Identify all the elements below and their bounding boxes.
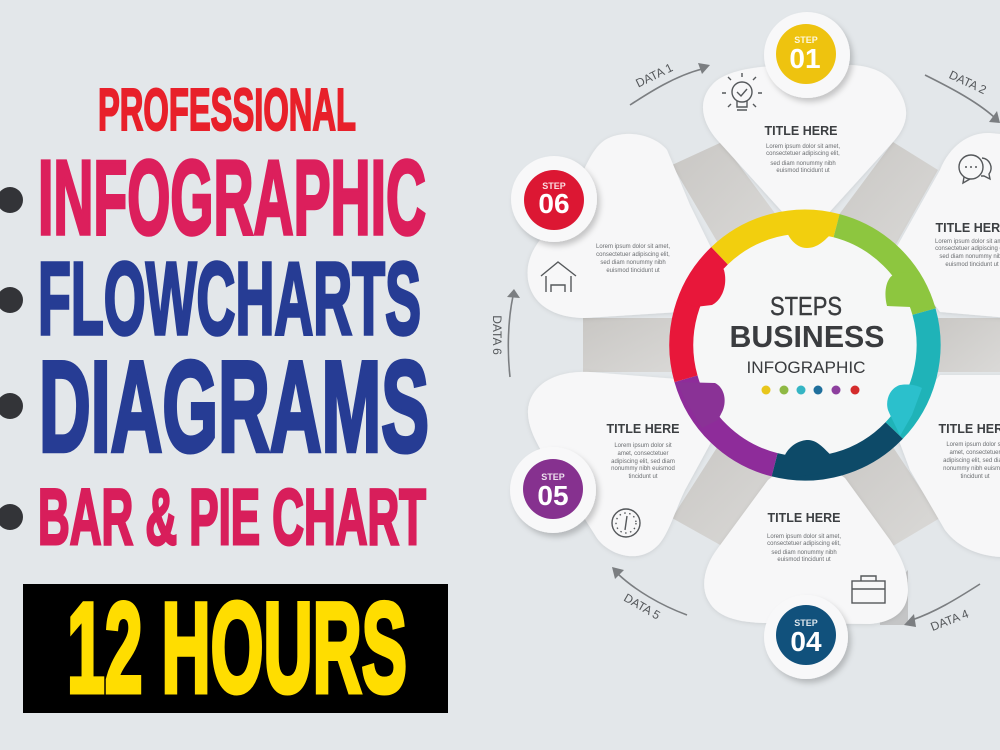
data 2 arrow: DATA 2 bbox=[947, 68, 989, 97]
data 5 arrow: DATA 5 bbox=[621, 591, 663, 623]
step 6 badge: 06 bbox=[538, 188, 570, 219]
title: step 1: TITLE HERE bbox=[765, 124, 837, 138]
body text: step 6: Lorem ipsum dolor sit amet, bbox=[596, 244, 670, 250]
data 2 arrow bbox=[925, 68, 1000, 123]
step 4 badge: 04 bbox=[790, 626, 822, 657]
body text: step 4: sed diam nonummy nibh bbox=[771, 550, 837, 556]
data 6 arrow bbox=[490, 289, 520, 377]
step 4 badge: STEP bbox=[794, 618, 818, 628]
body text: step 5: nonummy nibh euismod bbox=[611, 466, 675, 472]
ring segment: navy bbox=[772, 430, 894, 478]
heading: infographic: INFOGRAPHIC bbox=[38, 139, 426, 257]
data 4 arrow bbox=[904, 584, 980, 634]
body text: step 5: tincidunt ut bbox=[628, 474, 658, 480]
icon: chat bubbles bbox=[959, 155, 991, 183]
body text: step 4 bbox=[767, 534, 841, 563]
centre title: INFOGRAPHIC bbox=[746, 358, 866, 377]
body text: step 3 bbox=[943, 442, 1000, 480]
heading: flowcharts: FLOWCHARTS bbox=[38, 241, 421, 356]
body text: step 6: euismod tincidunt ut bbox=[606, 268, 660, 274]
data 1 arrow bbox=[630, 60, 710, 105]
banner: 12 hours bbox=[23, 577, 448, 720]
heading: professional: PROFESSIONAL bbox=[98, 77, 356, 143]
centre disk bbox=[691, 231, 919, 459]
title: step 5: TITLE HERE bbox=[607, 422, 679, 436]
step 6 badge bbox=[511, 156, 597, 242]
step 5 badge: STEP bbox=[541, 472, 565, 482]
icon: briefcase bbox=[852, 576, 885, 603]
panel: step 2 petal bbox=[895, 133, 1000, 318]
centre title: STEPS bbox=[770, 291, 842, 321]
body text: step 3: amet, consectetuer bbox=[949, 450, 1000, 456]
banner: 12 hours: 12 HOURS bbox=[67, 577, 407, 720]
body text: step 1: consectetuer adipiscing elit, bbox=[766, 151, 840, 157]
step 6 badge: STEP bbox=[542, 181, 566, 191]
body text: step 2: euismod tincidunt ut bbox=[945, 262, 999, 268]
body text: step 5: adipiscing elit, sed diam bbox=[611, 459, 675, 465]
ring segment: green bbox=[837, 226, 936, 312]
body text: step 6: consectetuer adipiscing elit, bbox=[596, 252, 670, 258]
body text: step 2 bbox=[935, 239, 1000, 268]
body text: step 1: Lorem ipsum dolor sit amet, bbox=[766, 144, 840, 150]
body text: step 4: euismod tincidunt ut bbox=[777, 557, 831, 563]
body text: step 6 bbox=[596, 244, 670, 274]
step 1 badge bbox=[764, 12, 850, 98]
data 4 arrow: DATA 4 bbox=[929, 607, 971, 634]
body text: step 1: euismod tincidunt ut bbox=[776, 168, 830, 174]
body text: step 3: tincidunt ut bbox=[960, 474, 990, 480]
data 6 arrow: DATA 6 bbox=[490, 315, 504, 355]
segmented colour ring bbox=[677, 213, 936, 478]
body text: step 6: sed diam nonummy nibh bbox=[600, 260, 666, 266]
body text: step 1 bbox=[766, 144, 840, 174]
panel: step 3 petal bbox=[895, 375, 1000, 557]
bullet dots bbox=[0, 187, 23, 530]
body text: step 4: consectetuer adipiscing elit, bbox=[767, 541, 841, 547]
step 5 badge: 05 bbox=[537, 480, 569, 511]
heading: diagrams: DIAGRAMS bbox=[39, 335, 429, 479]
body text: step 1: sed diam nonummy nibh bbox=[770, 161, 836, 167]
icon: house bbox=[541, 262, 576, 292]
data 1 arrow: DATA 1 bbox=[633, 60, 675, 90]
step 4 badge bbox=[764, 595, 848, 679]
icon: light bulb bbox=[722, 73, 762, 110]
body text: step 5 bbox=[611, 443, 675, 480]
ring segment: yellow bbox=[720, 213, 838, 256]
panel: step 1 petal bbox=[703, 64, 906, 238]
panel: step 6 petal bbox=[527, 134, 722, 318]
icon: clock bbox=[612, 509, 640, 537]
left headline block bbox=[0, 77, 429, 561]
centre title bbox=[730, 291, 884, 377]
heading: bar and pie chart: BAR & PIE CHART bbox=[38, 472, 426, 561]
panel: step 5 petal bbox=[528, 372, 715, 556]
ring segment: teal bbox=[887, 312, 929, 436]
title: step 4: TITLE HERE bbox=[768, 511, 840, 525]
step 5 badge bbox=[510, 447, 596, 533]
body text: step 5: Lorem ipsum dolor sit bbox=[614, 443, 672, 449]
ring segment: purple bbox=[677, 379, 775, 465]
panel: step 4 petal bbox=[704, 450, 908, 624]
centre colour dots bbox=[762, 386, 860, 394]
step 1 badge: STEP bbox=[794, 35, 818, 45]
grey connector strips bbox=[583, 142, 1000, 625]
body text: step 4: Lorem ipsum dolor sit amet, bbox=[767, 534, 841, 540]
body text: step 5: amet, consectetuer bbox=[617, 451, 669, 457]
ring segment: red bbox=[680, 252, 725, 379]
centre title: BUSINESS bbox=[730, 319, 884, 354]
data 5 arrow bbox=[612, 567, 687, 623]
step 1 badge: 01 bbox=[789, 43, 821, 74]
